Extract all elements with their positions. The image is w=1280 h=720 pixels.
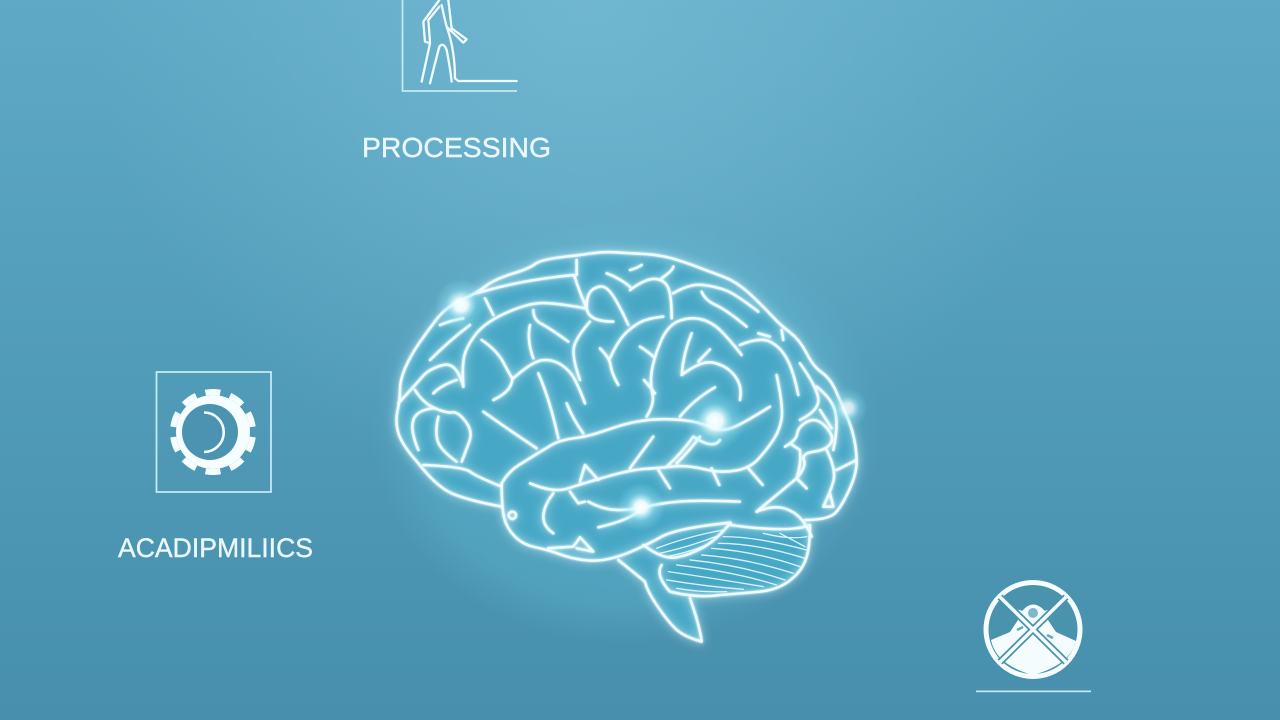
cerebellum stripes bbox=[657, 530, 807, 592]
glow spark: right edge bbox=[828, 388, 868, 428]
glow spark: centre right bbox=[685, 391, 745, 451]
icon: walking person in frame bbox=[402, 0, 517, 91]
divider line under crossed circle icon bbox=[976, 690, 1091, 692]
brain line art bbox=[396, 252, 857, 642]
temporal lobe bbox=[502, 407, 770, 483]
outer contour bbox=[396, 252, 857, 520]
brain illustration bbox=[371, 215, 881, 645]
brain halo bbox=[371, 215, 881, 645]
cerebellum contour bbox=[660, 527, 810, 596]
glow spark: lower centre bbox=[617, 483, 665, 531]
glow spark: top left bbox=[435, 279, 487, 331]
icon: gear in frame bbox=[156, 372, 271, 492]
label: processing: PROCESSING bbox=[362, 132, 551, 163]
icon: crossed circle with figure bbox=[986, 582, 1080, 676]
label: academics: ACADIPMILIICS bbox=[118, 533, 313, 563]
brain stem bbox=[618, 560, 702, 642]
